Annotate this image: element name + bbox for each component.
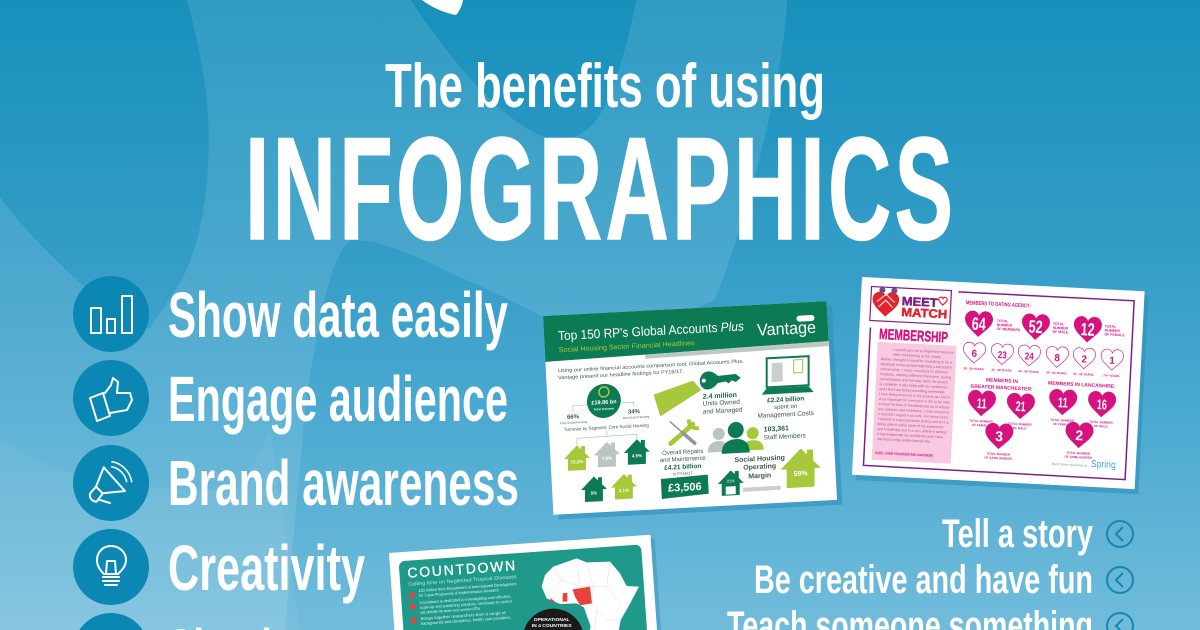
icon: thumbs up	[90, 378, 132, 421]
testimonial quote: after volunteering at the charity	[893, 353, 941, 359]
members in greater manchester: OF FEMALE	[972, 423, 989, 428]
laptop: Management Costs	[758, 410, 815, 420]
reason: tell a story: Tell a story	[942, 512, 1094, 556]
house chart: 5%	[591, 490, 597, 496]
testimonial quote: locations, meeting different characters, having	[880, 372, 951, 380]
age band hearts: 40 - 49 YEARS	[1018, 369, 1039, 374]
testimonial quote: conversations and feel easy when the search	[880, 377, 948, 384]
item: show data easily	[73, 276, 508, 352]
bullets: Countdown is dedicated to investigating cost-effective,	[419, 594, 511, 605]
testimonial quote: and knowledge but in a very different setting.	[877, 427, 947, 435]
members to dating agency: NUMBER	[1053, 326, 1069, 331]
members in greater manchester: OF SAME GENDER	[984, 455, 1013, 461]
members in lancashire: OF FEMALE	[1053, 422, 1071, 427]
testimonial quote: and I feel I am doing something worthwhile.	[879, 387, 945, 394]
turnover circle: £19.86 bn	[591, 399, 617, 407]
tools: £3,506	[668, 481, 702, 495]
testimonial quote: I signed up to be a chaperone because	[893, 348, 954, 355]
key and tag: and Managed	[703, 407, 743, 416]
testimonial quote: small part in how people beginning a successful	[881, 362, 952, 370]
item: simple	[73, 613, 293, 630]
age band hearts: 6	[971, 349, 978, 360]
logo: MEET	[901, 294, 939, 310]
spring logo	[1052, 457, 1116, 471]
intro text	[558, 359, 744, 381]
members to dating agency: OF MEMBERS	[996, 327, 1021, 332]
logo: MATCH	[901, 305, 948, 321]
members to dating agency: 64	[971, 314, 986, 334]
members in lancashire: TOTAL NUMBER	[1066, 451, 1091, 456]
spring logo: Spring	[1091, 459, 1116, 471]
testimonial quote: any isolation and loneliness. I look forward to	[878, 407, 949, 415]
testimonial quote	[872, 342, 957, 464]
countdown title: COUNTDOWN	[407, 557, 516, 581]
age band hearts: 23	[997, 350, 1007, 361]
item: brand awareness	[73, 445, 519, 521]
bullets: for 7-year Programme of Implementation Research	[419, 587, 499, 598]
age band hearts: 60 - 69 YEARS	[1073, 372, 1094, 377]
testimonial quote: HAZEL, CHAIR VOLUNTEER AND CHAPERONE	[875, 451, 934, 458]
tools: in FY16/17	[673, 470, 693, 476]
staff people	[708, 418, 807, 455]
icon: light bulb	[97, 546, 126, 585]
age band hearts: 1	[1109, 356, 1116, 367]
heading	[245, 52, 953, 271]
bullets: scale-up and sustaining solutions, necessary to control	[420, 599, 512, 610]
members in lancashire: 2	[1075, 427, 1084, 443]
members in greater manchester: 3	[995, 428, 1004, 444]
logo	[870, 286, 951, 324]
item: creativity: Creativity	[168, 532, 365, 604]
operating margin: Operating	[743, 463, 776, 472]
benefits list left	[73, 276, 519, 630]
members in lancashire: MEMBERS IN LANCASHIRE:	[1048, 381, 1116, 390]
africa map	[523, 558, 639, 630]
members in greater manchester: TOTAL NUMBER	[969, 419, 994, 424]
tools	[660, 418, 709, 499]
testimonial quote: I worked in a special needs setting and so it is	[878, 417, 949, 425]
members in greater manchester: TOTAL NUMBER	[1008, 422, 1033, 427]
testimonial quote: is complete. It also helps with my confidence	[880, 382, 948, 389]
age band hearts: 50 - 59 YEARS	[1046, 370, 1067, 375]
bullets: and eliminate the seven most common NTDs	[420, 606, 480, 615]
bullets: backgrounds and disciplines, health care providers,	[421, 615, 511, 626]
testimonial quote: is so important for everyone in life to be able	[879, 397, 950, 405]
members in greater manchester: 21	[1015, 398, 1026, 414]
house chart	[564, 439, 650, 503]
countdown subtitle: Calling time on Neglected Tropical Diseases	[408, 574, 518, 588]
members in greater manchester: OF MALE	[1013, 426, 1026, 431]
item: creativity	[73, 529, 365, 605]
turnover circle: Turnover by Segment: Core Social Housing	[564, 423, 649, 432]
members in lancashire: TOTAL NUMBER	[1089, 420, 1114, 425]
age band hearts: 70+ YEARS	[1103, 373, 1120, 378]
reasons list right	[727, 512, 1133, 630]
card content	[558, 355, 821, 504]
icon: megaphone	[90, 462, 132, 503]
testimonial quote: it and don't regard it as work. For many years	[878, 412, 948, 420]
members to dating agency: MEMBERS TO DATING AGENCY:	[966, 300, 1031, 310]
membership heading: MEMBERSHIP	[879, 326, 948, 346]
operating margin: 31%	[727, 478, 735, 484]
key and tag: 2.4 million	[703, 392, 737, 401]
frame	[863, 288, 1134, 480]
members in lancashire	[1044, 381, 1117, 461]
testimonial quote: lifeline I thought it would be rewarding to be a	[881, 357, 952, 365]
africa map: OPERATIONAL	[534, 617, 570, 623]
age band hearts: 30 - 39 YEARS	[991, 368, 1012, 373]
operating margin: 59%	[794, 470, 808, 478]
members in greater manchester: MEMBERS IN	[986, 377, 1018, 385]
members to dating agency	[964, 300, 1127, 344]
operating margin: Social Housing	[734, 455, 785, 464]
house chart: 4.5%	[632, 453, 642, 459]
members in greater manchester: GREATER MANCHESTER:	[970, 384, 1033, 393]
africa map: IN 4 COUNTRIES	[532, 623, 572, 629]
intro text: Vantage present our headline findings for FY16/17.	[558, 369, 684, 381]
tools: Overall Repairs	[662, 449, 703, 457]
members to dating agency: OF FEMALE	[1104, 332, 1125, 337]
turnover circle: Core Social Housing	[560, 420, 588, 425]
house chart: 72.2%	[571, 459, 583, 465]
testimonial quote: It has helped with my confidence and I have	[877, 432, 943, 439]
age band hearts: 18 - 29 YEARS	[963, 366, 984, 371]
members in greater manchester: 11	[976, 395, 987, 411]
intro text: Using our online financial accounts comparison tool, Global Accounts Plus,	[558, 359, 744, 374]
card: meet and match membership	[852, 277, 1149, 494]
testimonial quote: met many lovely people through this.	[877, 437, 931, 444]
icon: bar chart	[91, 296, 132, 333]
card header: Top 150 RP's Global Accounts Plus	[558, 318, 745, 343]
age band hearts: 2	[1081, 354, 1088, 365]
item: brand awareness: Brand awareness	[168, 447, 519, 519]
key and tag: Units Owned	[703, 399, 740, 408]
members in greater manchester	[965, 377, 1036, 462]
members in lancashire: OF MALE	[1094, 424, 1108, 429]
members to dating agency: NUMBER	[997, 323, 1013, 328]
members in lancashire: 11	[1058, 394, 1068, 411]
testimonial quote: I love being involved in the project as I feel it	[879, 392, 950, 400]
key and tag	[655, 370, 743, 418]
members in lancashire: OF SAME GENDER	[1064, 454, 1093, 460]
staff people: Staff Members	[764, 432, 807, 442]
members to dating agency: 52	[1028, 317, 1043, 337]
members to dating agency: TOTAL	[1053, 322, 1065, 326]
laptop: spent on	[774, 404, 797, 411]
card header	[543, 301, 829, 364]
heading line 2: INFOGRAPHICS	[245, 107, 953, 271]
item: engage audience	[73, 360, 508, 436]
laptop	[758, 356, 815, 420]
members to dating agency: 12	[1080, 319, 1095, 340]
bullets: £32 million from Department of International Development	[419, 581, 517, 593]
turnover circle: Total Turnover	[594, 406, 615, 411]
members in greater manchester: TOTAL NUMBER	[986, 452, 1011, 457]
testimonial quote: to meet for love or friendship and so to reduce	[878, 402, 950, 410]
card: green financial headlines	[543, 301, 842, 520]
age band hearts: 8	[1054, 353, 1061, 364]
card header: Social Housing Sector Financial Headlines	[559, 340, 695, 354]
turnover circle: Non-Social Housing	[623, 415, 650, 420]
testimonial quote: being able to utilise some of my experience	[877, 422, 944, 429]
turnover circle: 34%	[628, 409, 641, 416]
members to dating agency: NUMBER	[1105, 328, 1121, 333]
tools: £4.21 billion	[664, 463, 701, 472]
operating margin: Margin	[748, 472, 771, 480]
house chart: 3.1%	[619, 488, 629, 493]
members to dating agency: OF MALE	[1052, 330, 1069, 335]
members in lancashire: 16	[1096, 396, 1107, 413]
turnover circle: 66%	[567, 414, 580, 421]
members in lancashire: TOTAL NUMBER	[1050, 418, 1075, 423]
laptop: £2.24 billion	[767, 395, 804, 404]
card: countdown	[389, 534, 668, 630]
tools: and Maintenance	[660, 456, 706, 464]
age band hearts	[962, 342, 1124, 378]
members to dating agency: TOTAL	[997, 319, 1009, 323]
item: engage audience: Engage audience	[168, 363, 508, 435]
operating margin	[718, 447, 821, 496]
staff people: 103,361	[764, 425, 789, 434]
testimonial quote: relationship. I enjoy travelling to different	[880, 367, 948, 374]
turnover circle	[560, 382, 650, 446]
members to dating agency: TOTAL	[1105, 324, 1117, 329]
spring logo: Match Maker supported by	[1052, 462, 1088, 468]
top logo fragment	[422, 0, 463, 15]
item: show data easily: Show data easily	[168, 279, 508, 351]
heading line 1: The benefits of using	[385, 52, 825, 121]
card sheet	[389, 534, 668, 630]
bullets	[409, 581, 520, 627]
age band hearts: 24	[1024, 351, 1034, 363]
bullets: Brings together researchers from a range of	[420, 610, 507, 621]
house chart: 7.8%	[602, 456, 612, 461]
card header: Vantage	[757, 318, 816, 340]
